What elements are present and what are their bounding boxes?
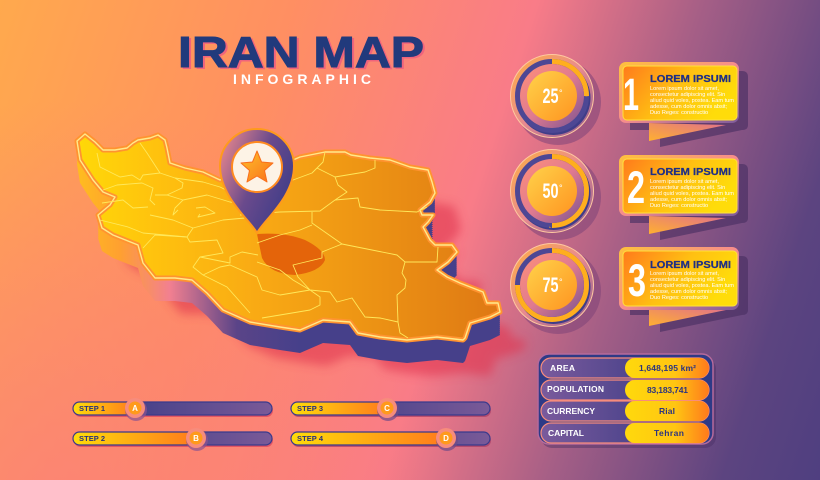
country facts table — [538, 354, 716, 448]
step 4 slider: STEP 4 — [297, 434, 324, 443]
row: area: AREA — [550, 363, 575, 373]
card shadow — [630, 71, 748, 147]
card shadow — [630, 164, 748, 240]
gauge 25 percent: 25 — [542, 85, 559, 108]
step 3 slider: STEP 3 — [297, 404, 323, 413]
step 4 slider — [291, 428, 491, 451]
card 2: adesse, cum dolor omnis absit; — [650, 197, 728, 203]
step 1 slider: A — [132, 404, 138, 413]
row: currency — [541, 401, 709, 421]
card 1: adesse, cum dolor omnis absit; — [650, 104, 728, 110]
step 1 slider — [73, 398, 273, 421]
card 2: 2 — [627, 162, 645, 213]
table frame — [541, 358, 716, 448]
gauge 50 percent: ° — [559, 183, 563, 193]
card 1: consectetur adipiscing elit. Sin — [650, 92, 725, 98]
isometric map of Iran — [77, 129, 526, 376]
gauge 50 percent — [510, 150, 601, 240]
step 3 slider — [291, 398, 491, 421]
row: capital: CAPITAL — [548, 428, 584, 438]
row: population: POPULATION — [547, 384, 604, 394]
row: population: 83,183,741 — [647, 385, 688, 395]
card 3: aliud quid voles, postea. Eam tum — [650, 283, 734, 289]
step 2 slider: STEP 2 — [79, 434, 105, 443]
card 2: Lorem ipsum dolor sit amet, — [650, 179, 719, 185]
row: area — [541, 358, 709, 378]
card 3: adesse, cum dolor omnis absit; — [650, 289, 728, 295]
gauge 75 percent: 75 — [542, 274, 559, 297]
gauge 50 percent: 50 — [542, 180, 558, 203]
card 2: Duo Reges: constructio — [650, 203, 708, 209]
row: currency: CURRENCY — [547, 406, 595, 416]
card 3: Lorem ipsum dolor sit amet, — [650, 271, 719, 277]
title: IRAN MAP — [178, 28, 424, 77]
card 2: consectetur adipiscing elit. Sin — [650, 185, 725, 191]
gauge 75 percent: ° — [559, 277, 563, 287]
location pin — [220, 129, 294, 233]
card tail — [649, 123, 726, 141]
map extruded side — [77, 135, 500, 363]
step 2 slider: B — [193, 434, 199, 443]
gauge 25 percent: ° — [559, 88, 563, 98]
row: currency: Rial — [659, 406, 675, 416]
card shadow — [630, 256, 748, 332]
gauge 25 percent — [510, 54, 601, 145]
card 3: consectetur adipiscing elit. Sin — [650, 277, 725, 283]
card 2: aliud quid voles, postea. Eam tum — [650, 191, 734, 197]
card 1: 1 — [623, 69, 639, 120]
step 4 slider: D — [443, 434, 449, 443]
highlighted province — [257, 234, 325, 275]
card 1 — [619, 62, 748, 147]
province borders — [97, 143, 438, 338]
row: capital — [541, 423, 709, 443]
card 2 — [619, 155, 748, 240]
row: capital: Tehran — [654, 428, 684, 438]
row: area: 1,648,195 km² — [639, 363, 696, 373]
subtitle: INFOGRAPHIC — [233, 71, 371, 87]
card 1: aliud quid voles, postea. Eam tum — [650, 98, 734, 104]
card 3: Duo Reges: constructio — [650, 295, 708, 301]
gauge 75 percent — [510, 244, 601, 334]
card 1: Lorem ipsum dolor sit amet, — [650, 86, 719, 92]
card 1: Duo Reges: constructio — [650, 110, 708, 116]
card 2: LOREM IPSUMI — [650, 166, 731, 178]
step 1 slider: STEP 1 — [79, 404, 105, 413]
map drop shadow — [103, 170, 526, 376]
card tail — [649, 308, 726, 326]
card tail — [649, 216, 726, 234]
step 3 slider: C — [384, 404, 390, 413]
row: population — [541, 380, 709, 400]
map top surface — [77, 134, 500, 340]
card 1: LOREM IPSUMI — [650, 73, 731, 85]
step 2 slider — [73, 428, 273, 451]
card 3: 3 — [628, 255, 646, 306]
card 3 — [619, 247, 748, 332]
card 3: LOREM IPSUMI — [650, 259, 731, 271]
title: IRAN MAP — [180, 30, 426, 78]
